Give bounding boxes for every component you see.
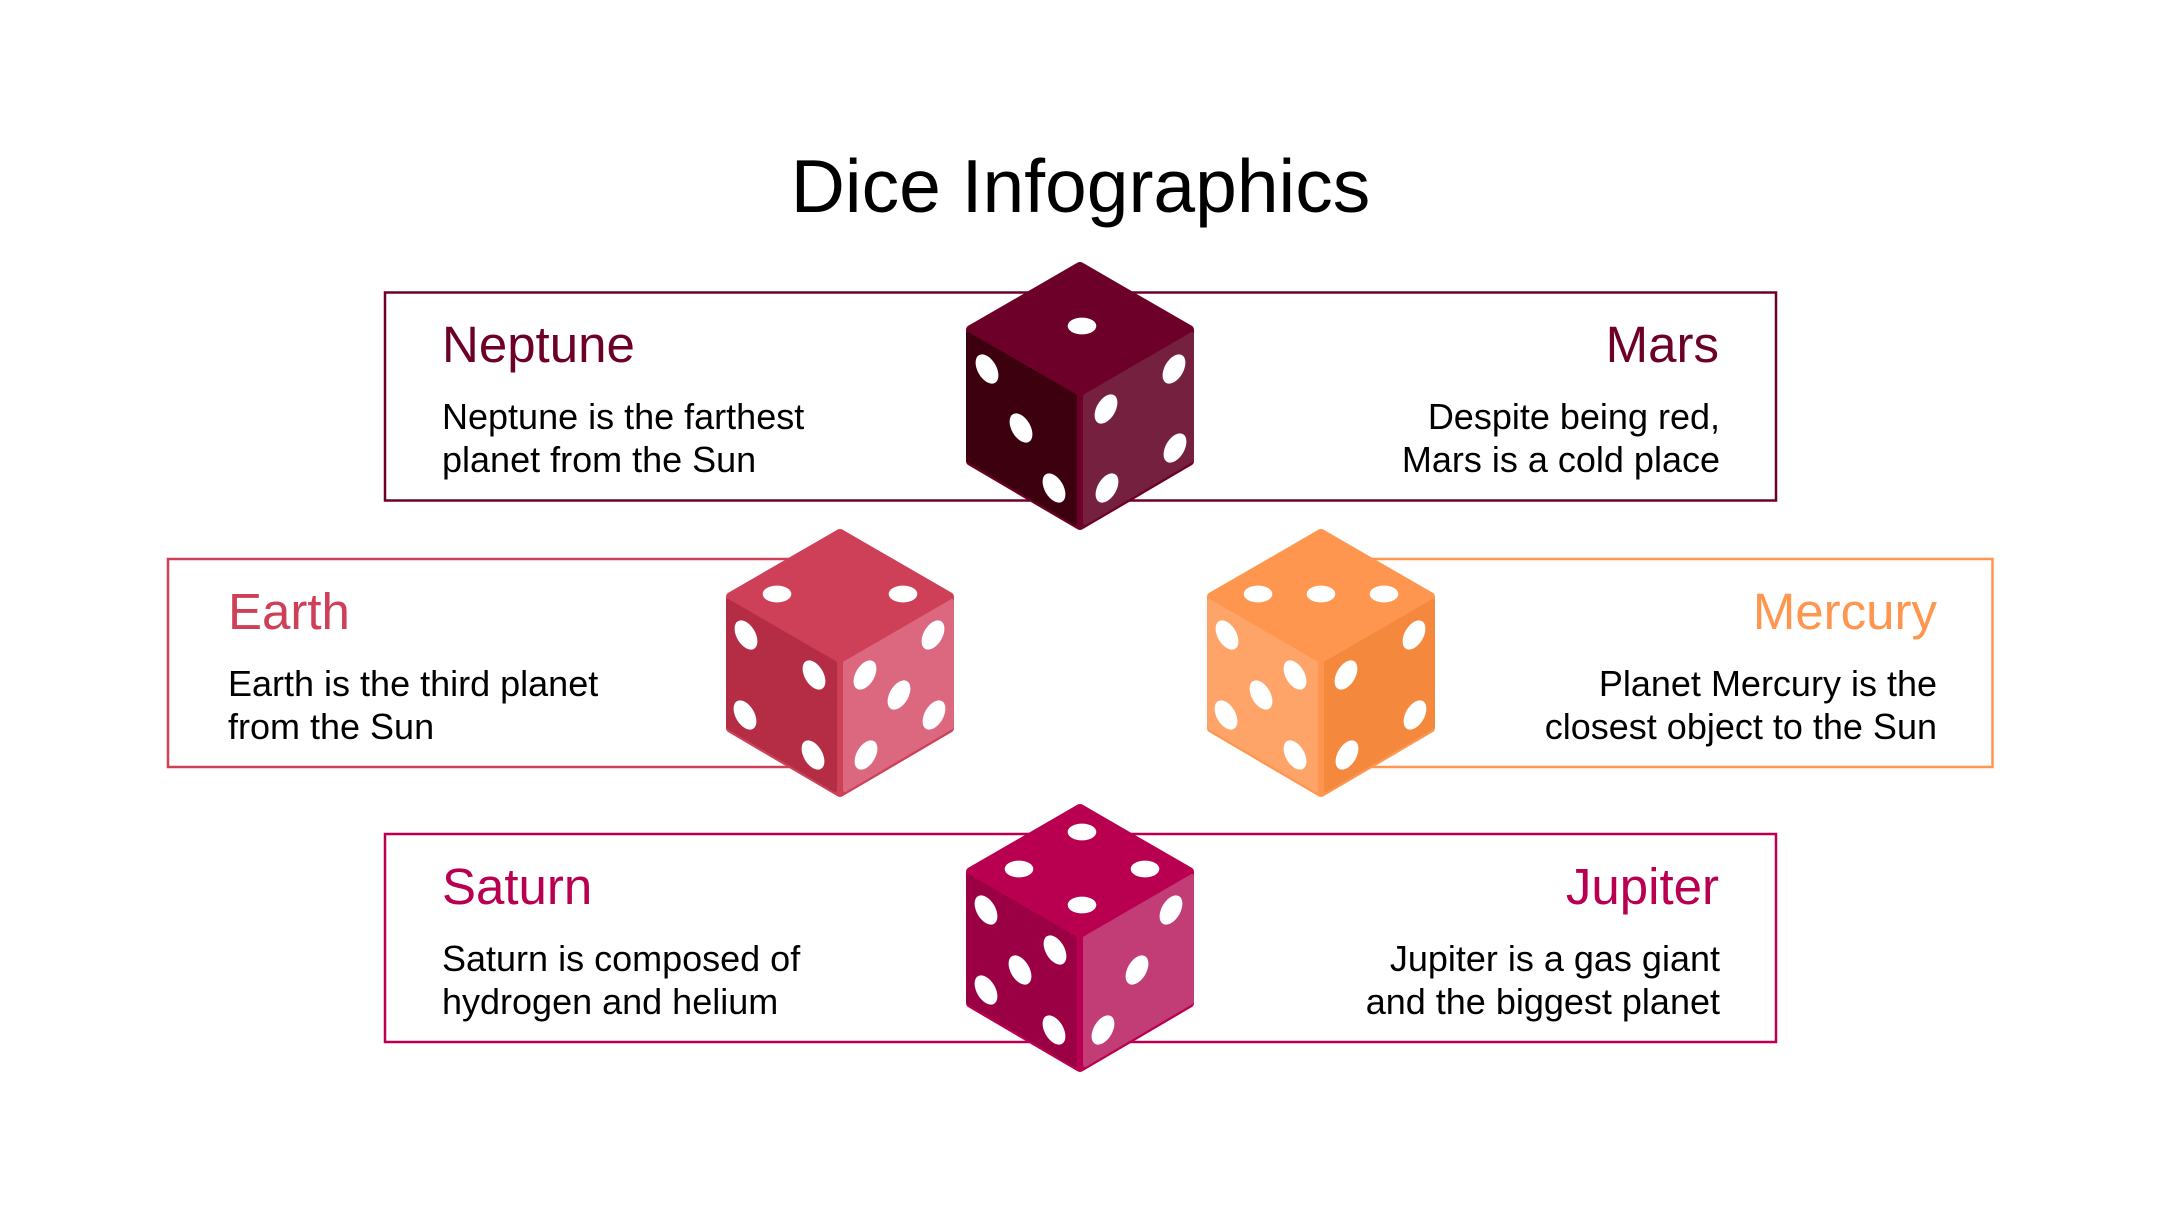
text: Saturn: Saturn is composed of [442,938,801,979]
icon: Saturn Jupiter die [968,809,1192,1067]
text: Jupiter: and the biggest planet [1366,981,1720,1022]
text: Mars [1402,316,1720,480]
icon: Earth die [728,534,952,792]
icon: Mercury die [1209,534,1433,792]
text: Saturn [442,858,801,1022]
text: Saturn: Saturn [442,858,592,915]
text: Jupiter: Jupiter [1566,858,1719,915]
text: Earth: Earth is the third planet [228,663,598,704]
panel: Earth [168,559,800,767]
text: Mercury: Planet Mercury is the [1599,663,1937,704]
text: Saturn: hydrogen and helium [442,981,778,1022]
text: Earth: from the Sun [228,706,434,747]
text: Mercury: Mercury [1753,583,1937,640]
text: Neptune [442,316,804,480]
panel: Saturn and Jupiter [385,834,1776,1042]
text: Mercury: closest object to the Sun [1545,706,1937,747]
text: Jupiter [1366,858,1720,1022]
text: Mars: Mars is a cold place [1402,439,1720,480]
text: Neptune: Neptune [442,316,635,373]
text: Neptune: planet from the Sun [442,439,756,480]
panel: Mercury [1360,559,1992,767]
panel: Neptune and Mars [385,292,1776,500]
text: Earth [228,583,598,747]
title: Dice Infographics [791,144,1370,228]
text: Mars: Mars [1606,316,1719,373]
text: Mars: Despite being red, [1428,396,1720,437]
icon: Neptune Mars die [968,267,1192,525]
text: Jupiter: Jupiter is a gas giant [1390,938,1720,979]
text: Neptune: Neptune is the farthest [442,396,804,437]
text: Earth: Earth [228,583,350,640]
text: Mercury [1545,583,1937,747]
